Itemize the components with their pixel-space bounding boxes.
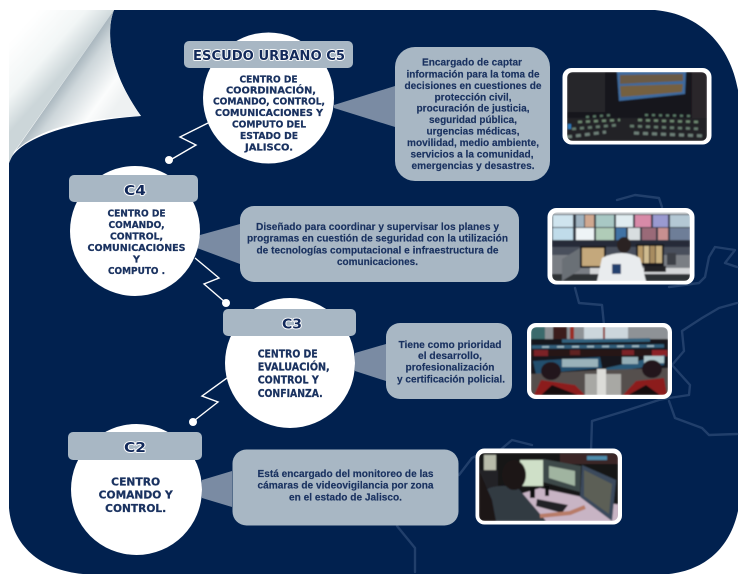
callout: C5 description: movilidad, medio ambiente, bbox=[407, 138, 539, 149]
callout: C4 description: comunicaciones. bbox=[337, 257, 418, 268]
connector: C3 to C2 bbox=[189, 378, 227, 426]
C5 name text: COMANDO, CONTROL, bbox=[213, 97, 325, 108]
C2 name text bbox=[99, 477, 173, 515]
callout: C2 description: en el estado de Jalisco. bbox=[289, 492, 402, 503]
photo: C3 operators room bbox=[527, 323, 672, 399]
C2 name text: CONTROL. bbox=[105, 503, 166, 515]
C5 name text bbox=[213, 74, 325, 154]
heading banner C2 bbox=[68, 432, 202, 460]
callout pointer C3 bbox=[355, 344, 386, 381]
C5 name text: COORDINACIÓN, bbox=[226, 84, 316, 96]
C5 name text: COMUNICACIONES Y bbox=[215, 108, 324, 119]
callout: C5 description: urgencias médicas, bbox=[426, 126, 520, 137]
C4 name text: COMPUTO . bbox=[108, 266, 165, 277]
page curl bbox=[9, 10, 141, 163]
C3 name text: CENTRO DE bbox=[258, 348, 318, 360]
callout: C3 description: Tiene como prioridad bbox=[398, 340, 502, 351]
callout: C3 description: el desarrollo, bbox=[418, 351, 482, 362]
callout: C4 description: de tecnologías computacional e infraestructura de bbox=[256, 245, 499, 256]
C5 name text: JALISCO. bbox=[244, 142, 293, 154]
C3 name text: CONTROL Y bbox=[258, 375, 319, 387]
C5 name text: CENTRO DE bbox=[240, 74, 298, 86]
C4 name text: Y bbox=[132, 254, 141, 265]
heading banner C4 bbox=[69, 175, 198, 202]
callout: C4 description: Diseñado para coordinar y supervisar los planes y bbox=[256, 222, 499, 233]
C2 name text: COMANDO Y bbox=[99, 490, 173, 502]
photo: C5 control room bbox=[562, 68, 712, 144]
heading banner C4: C4 bbox=[124, 183, 146, 199]
map outline background bbox=[397, 195, 737, 572]
heading banner C3 bbox=[223, 309, 356, 336]
callout: C2 description: Está encargado del monitoreo de las bbox=[258, 469, 434, 480]
callout: C5 description: Encargado de captar bbox=[422, 58, 522, 69]
C5 name text: ESTADO DE bbox=[240, 131, 298, 142]
C3 name text: CONFIANZA. bbox=[258, 388, 323, 400]
heading banner C2: C2 bbox=[124, 440, 146, 456]
callout: C5 description: protección civil, bbox=[434, 93, 512, 104]
callout: C5 description: servicios a la comunidad, bbox=[410, 150, 534, 161]
connector: C4 to C3 bbox=[195, 258, 230, 307]
callout pointer C5 bbox=[334, 86, 395, 127]
callout: C4 description: programas en cuestión de seguridad con la utilización bbox=[247, 234, 508, 245]
callout: C5 description bbox=[395, 47, 550, 181]
photo: C2 operator at monitors bbox=[476, 448, 622, 524]
C3 name text bbox=[258, 348, 330, 400]
callout: C2 description: cámaras de videovigilancia por zona bbox=[258, 481, 434, 492]
panel: C5 node bbox=[184, 32, 395, 164]
panel: C4 node bbox=[69, 166, 240, 296]
C4 name text: COMUNICACIONES bbox=[88, 243, 186, 254]
photo: C4 video wall operator bbox=[548, 208, 694, 284]
C4 name text: CENTRO DE bbox=[108, 209, 166, 220]
callout: C4 description bbox=[240, 206, 519, 282]
callout: C5 description: información para la toma de bbox=[406, 69, 540, 80]
heading banner C5 bbox=[184, 41, 353, 68]
callout: C3 description: profesionalización bbox=[406, 363, 494, 374]
connector: C5 to C4 bbox=[165, 123, 208, 164]
callout: C3 description bbox=[386, 323, 512, 399]
callout: C5 description: procuración de justicia, bbox=[416, 104, 530, 115]
callout: C5 description: decisiones en cuestiones de bbox=[404, 81, 542, 92]
callout: C2 description bbox=[232, 450, 458, 526]
C4 name text: CONTROL, bbox=[110, 231, 163, 242]
heading banner C3: C3 bbox=[282, 317, 302, 333]
panel: C3 node bbox=[223, 298, 386, 428]
callout: C5 description: emergencias y desastres. bbox=[412, 161, 535, 172]
callout pointer C2 bbox=[202, 471, 232, 507]
C5 name text: COMPUTO DEL bbox=[232, 120, 306, 130]
C2 name text: CENTRO bbox=[111, 477, 160, 489]
C4 name text bbox=[88, 209, 186, 277]
C3 name text: EVALUACIÓN, bbox=[258, 361, 330, 374]
C4 name text: COMANDO, bbox=[108, 220, 164, 231]
callout pointer C4 bbox=[197, 224, 240, 264]
callout: C5 description: seguridad pública, bbox=[429, 115, 517, 126]
panel: C2 node bbox=[68, 424, 232, 555]
callout: C3 description: y certificación policial. bbox=[397, 374, 505, 385]
heading banner C5: ESCUDO URBANO C5 bbox=[193, 48, 345, 64]
